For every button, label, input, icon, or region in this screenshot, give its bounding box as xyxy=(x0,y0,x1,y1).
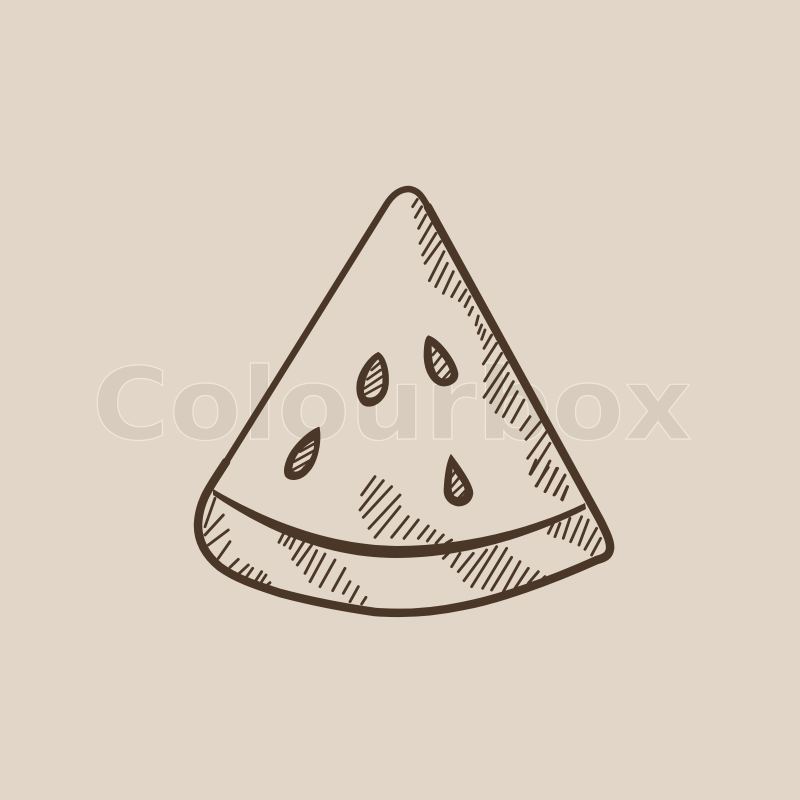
seed 1 xyxy=(357,353,388,406)
watermark text: Colourbox xyxy=(92,346,692,463)
icon: watermelon slice xyxy=(198,189,610,613)
slice outline: left edge and apex xyxy=(226,189,428,462)
seeds xyxy=(285,336,473,506)
rind arc xyxy=(213,489,586,558)
seed 2 xyxy=(424,336,458,386)
seed 3 xyxy=(285,427,320,479)
seed 4 xyxy=(444,455,473,506)
hatching: right edge xyxy=(413,199,567,499)
hatching: flesh and rind xyxy=(205,460,601,604)
slice outline: right edge and bottom xyxy=(198,207,610,613)
